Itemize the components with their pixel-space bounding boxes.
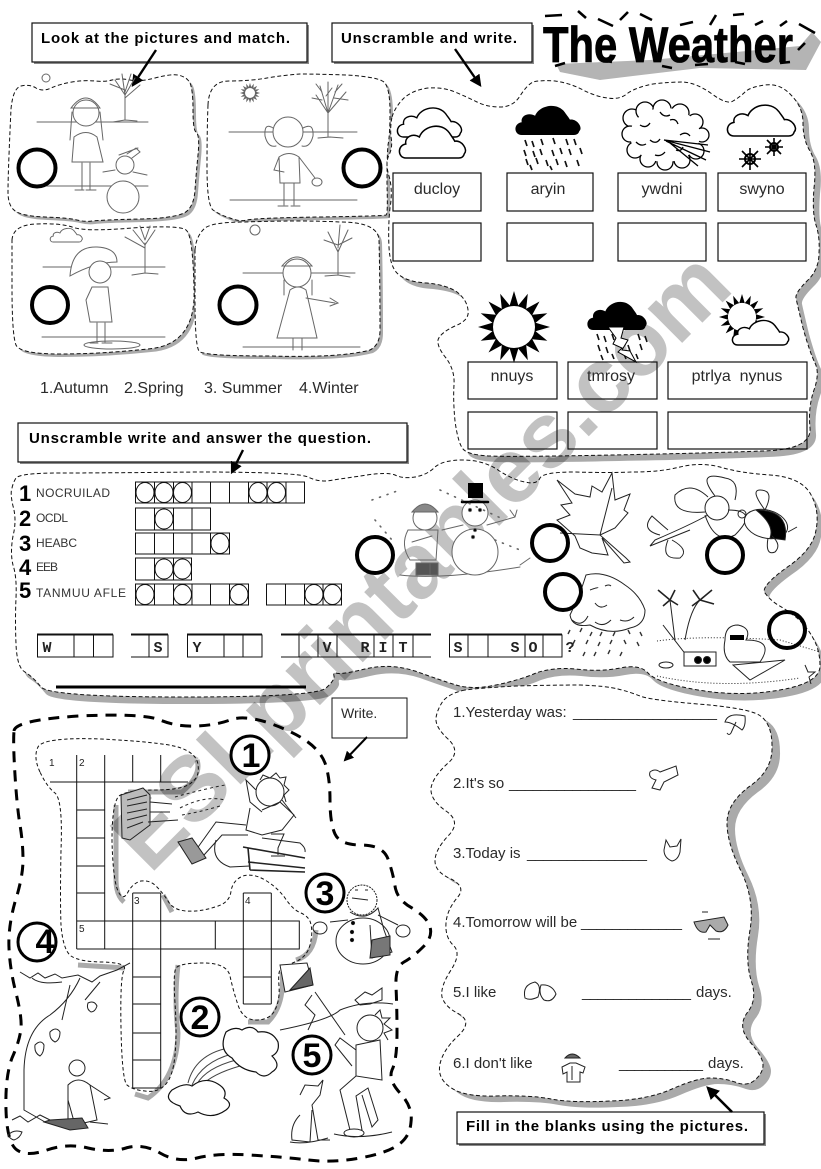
numbered circles: crossword pictures	[18, 736, 344, 1075]
panel outline: match the seasons, picture 1	[8, 75, 202, 224]
sentence 4: _____________	[580, 914, 683, 931]
season word list	[40, 380, 359, 397]
clue list: scrambled words: HEABC	[36, 536, 77, 550]
numbered circles: crossword pictures: 2	[191, 999, 209, 1037]
picture: winter girl and snowman	[37, 74, 148, 213]
clue list: scrambled words	[19, 481, 126, 603]
picture: summer girl with sun	[229, 82, 357, 206]
picture: beach	[657, 590, 820, 684]
numbered circles: crossword pictures: 5	[303, 1037, 321, 1075]
clue list: scrambled words: TANMUU AFLE	[36, 586, 126, 600]
instruction box: write: Write.	[341, 705, 377, 721]
panel outline: match the seasons, picture 3	[12, 224, 197, 357]
clue list: scrambled words: 3	[19, 531, 31, 556]
icon: rain cloud	[515, 106, 582, 170]
sentence 1: __________________	[572, 704, 718, 721]
icon: sun behind cloud	[719, 294, 789, 345]
sentence 5: 5.I like	[453, 984, 496, 1001]
sentence 4	[453, 914, 683, 931]
sentence 2	[453, 775, 637, 792]
panel outline: unscramble weather words	[387, 81, 821, 462]
answer row: question letter boxes: W	[42, 640, 52, 657]
instruction box: unscramble and answer	[18, 423, 409, 464]
picture: kid and snowman	[372, 483, 530, 576]
sentence 6: days.	[708, 1055, 744, 1072]
picture: rainbow between clouds	[168, 1027, 278, 1116]
word box grid: unscramble row 1	[393, 173, 806, 261]
icon: swimsuit	[664, 839, 681, 861]
picture: autumn tree and child	[8, 963, 130, 1140]
answer row: question letter boxes: S	[453, 640, 463, 657]
icon: sunglasses	[694, 912, 728, 939]
icon: hat and shirt	[562, 1054, 585, 1082]
answer row: question letter boxes: O	[528, 640, 538, 657]
instruction box: write	[332, 698, 407, 738]
season word list: 3. Summer	[204, 380, 283, 397]
answer row: question letter boxes: S	[153, 640, 163, 657]
word box grid: unscramble row 2: nnuys	[491, 368, 533, 385]
crossword grid: 4	[245, 896, 251, 907]
season word list: 1.Autumn	[40, 380, 108, 397]
picture: spring girl	[243, 225, 360, 350]
sentence 5	[453, 984, 732, 1001]
sentence 3	[453, 845, 648, 862]
crossword grid: 5	[79, 924, 85, 935]
picture: smiling rain cloud	[568, 574, 645, 656]
panel outline: crossword	[6, 715, 431, 1161]
icon: mittens	[524, 982, 556, 1001]
season word list: 4.Winter	[299, 380, 359, 397]
clue list: scrambled words: 2	[19, 506, 31, 531]
panel outline: fill in the blanks	[431, 685, 780, 1108]
icon: storm cloud	[587, 302, 647, 362]
arrow: match box to pictures	[133, 50, 156, 85]
sentence 1: 1.Yesterday was:	[453, 704, 567, 721]
watermark: ESLprintables.com	[92, 232, 750, 889]
instruction box: fill in the blanks	[457, 1112, 766, 1146]
icon: windy cloud	[622, 100, 710, 170]
instruction box: unscramble and write: Unscramble and write.	[341, 30, 517, 47]
word box grid: unscramble row 1: ywdni	[642, 181, 682, 198]
icon: snow cloud	[727, 105, 795, 170]
sentence 3: 3.Today is	[453, 845, 521, 862]
sentence 2: ________________	[508, 775, 637, 792]
word box grid: unscramble row 2: ptrlya nynus	[692, 368, 782, 385]
clue list: scrambled words: 4	[19, 555, 32, 580]
sentence 6: ___________	[618, 1055, 704, 1072]
answer row: question letter boxes: R	[360, 640, 370, 657]
instruction box: fill in the blanks: Fill in the blanks using the pictures.	[466, 1118, 748, 1135]
picture: autumn girl with umbrella	[42, 226, 165, 349]
panel outline: unscramble and answer band	[11, 460, 821, 704]
word box grid: unscramble row 2	[468, 362, 807, 449]
icon: scarf	[650, 766, 678, 790]
picture: flower and bee	[648, 476, 797, 558]
clue list: scrambled words: 5	[19, 578, 31, 603]
answer row: question letter boxes: V	[322, 640, 332, 657]
picture: boy with kite and dog	[280, 963, 393, 1143]
sentence 5: ______________	[581, 984, 692, 1001]
crossword grid: 2	[79, 758, 85, 769]
sentence 6: 6.I don't like	[453, 1055, 533, 1072]
answer line	[56, 686, 306, 688]
word box grid: unscramble row 1: ducloy	[414, 181, 460, 198]
word box grid: unscramble row 1: swyno	[739, 181, 785, 198]
crossword grid: 3	[134, 896, 140, 907]
instruction box: look and match	[32, 23, 309, 64]
sentence 2: 2.It's so	[453, 775, 504, 792]
picture: snowman with scarf	[313, 885, 410, 964]
clue list: scrambled words: EEB	[36, 560, 58, 574]
arrow: write to crossword	[345, 737, 367, 760]
answer circles: band pictures	[357, 525, 805, 648]
clue list: scrambled words: NOCRUILAD	[36, 486, 110, 500]
answer row: question letter boxes	[37, 634, 575, 657]
crossword grid: 1	[49, 758, 55, 769]
sentence 6	[453, 1055, 744, 1072]
clue list: scrambled words: OCDL	[36, 511, 68, 525]
sentence 5: days.	[696, 984, 732, 1001]
instruction box: unscramble and answer: Unscramble write and answer the question.	[29, 430, 371, 447]
sentence 4: 4.Tomorrow will be	[453, 914, 577, 931]
word box grid: unscramble row 1: aryin	[531, 181, 565, 198]
sentence 1	[453, 704, 718, 721]
icon: umbrella	[725, 715, 745, 734]
arrow: fill in box to panel	[708, 1088, 732, 1112]
word box grid: unscramble row 2: tmrosy	[587, 368, 635, 385]
numbered circles: crossword pictures: 4	[36, 923, 55, 961]
answer row: question letter boxes: T	[398, 640, 408, 657]
answer circles: four season pictures	[18, 150, 380, 324]
letter boxes with circled letters	[136, 482, 342, 605]
sentence 3: _______________	[526, 845, 648, 862]
panel outline: match the seasons, picture 2	[207, 74, 393, 224]
icon: sun	[478, 291, 550, 363]
answer row: question letter boxes: Y	[192, 640, 202, 657]
crossword grid	[49, 755, 299, 1088]
icon: two clouds	[397, 108, 466, 158]
instruction box: look and match: Look at the pictures and match.	[41, 30, 290, 47]
clue list: scrambled words: 1	[19, 481, 31, 506]
arrow: unscramble box to panel	[455, 49, 480, 85]
answer row: question letter boxes: I	[378, 640, 388, 657]
arrow: to unscramble band	[232, 450, 243, 472]
instruction box: unscramble and write	[332, 23, 534, 64]
panel outline: match the seasons, picture 4	[195, 221, 383, 359]
picture: maple leaf	[557, 473, 630, 563]
answer row: question letter boxes: S	[510, 640, 520, 657]
answer row: question letter boxes: ?	[565, 640, 575, 657]
numbered circles: crossword pictures: 3	[316, 875, 334, 913]
numbered circles: crossword pictures: 1	[242, 737, 260, 775]
season word list: 2.Spring	[124, 380, 184, 397]
picture: man relaxing by fan	[121, 773, 305, 872]
